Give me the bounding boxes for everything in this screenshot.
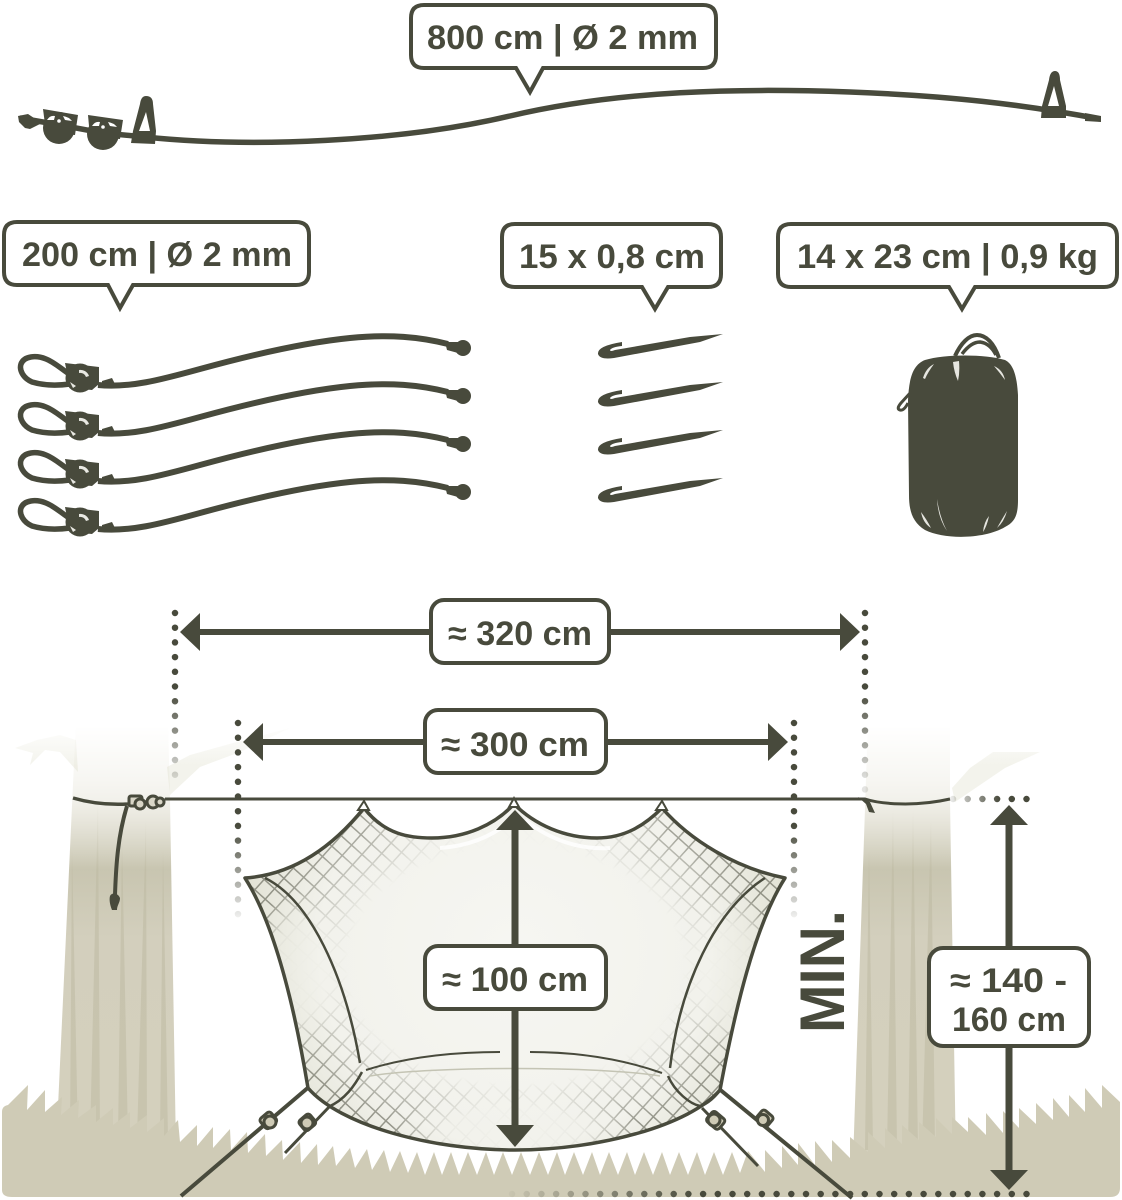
grass ground xyxy=(2,1085,1120,1197)
stuff bag xyxy=(898,335,1018,537)
dimension arrow: 320 cm xyxy=(180,600,860,663)
dimension arrow: 100 cm xyxy=(425,810,606,1147)
left tree xyxy=(16,740,248,1136)
label: 15 x 0,8 cm xyxy=(502,224,721,309)
dimension arrow: 140-160 cm xyxy=(929,805,1089,1190)
dimension arrow: 300 cm xyxy=(243,710,788,773)
label: 200 cm: 200 cm | Ø 2 mm xyxy=(22,236,292,274)
label: 14 x 23 cm | 0,9 kg xyxy=(778,224,1117,309)
label: 14 x 23 cm | 0,9 kg: 14 x 23 cm | 0,9 kg xyxy=(797,238,1098,276)
dimension arrow: 300 cm: ≈ 300 cm xyxy=(441,726,589,764)
top rope with tensioners and anchors xyxy=(18,71,1101,150)
dotted guides xyxy=(175,613,1030,1194)
dimension arrow: 320 cm: ≈ 320 cm xyxy=(448,615,592,653)
label: 200 cm xyxy=(4,222,309,308)
four guy lines xyxy=(20,336,471,536)
hammock with mosquito net xyxy=(245,798,785,1150)
dimension arrow: 140-160 cm: 160 cm xyxy=(952,1001,1066,1039)
guy lines to the ground xyxy=(181,1086,852,1198)
dimension arrow: 140-160 cm: ≈ 140 - xyxy=(950,962,1067,1000)
MIN. label: MIN. xyxy=(788,910,858,1033)
right tree xyxy=(853,720,1040,1162)
four tent pegs xyxy=(598,334,723,502)
label: 800 cm: 800 cm | Ø 2 mm xyxy=(427,19,698,57)
ridge line with knots xyxy=(73,796,950,910)
label: 15 x 0,8 cm: 15 x 0,8 cm xyxy=(519,238,705,276)
dimension arrow: 100 cm: ≈ 100 cm xyxy=(442,961,588,999)
label: 800 cm xyxy=(411,5,716,92)
